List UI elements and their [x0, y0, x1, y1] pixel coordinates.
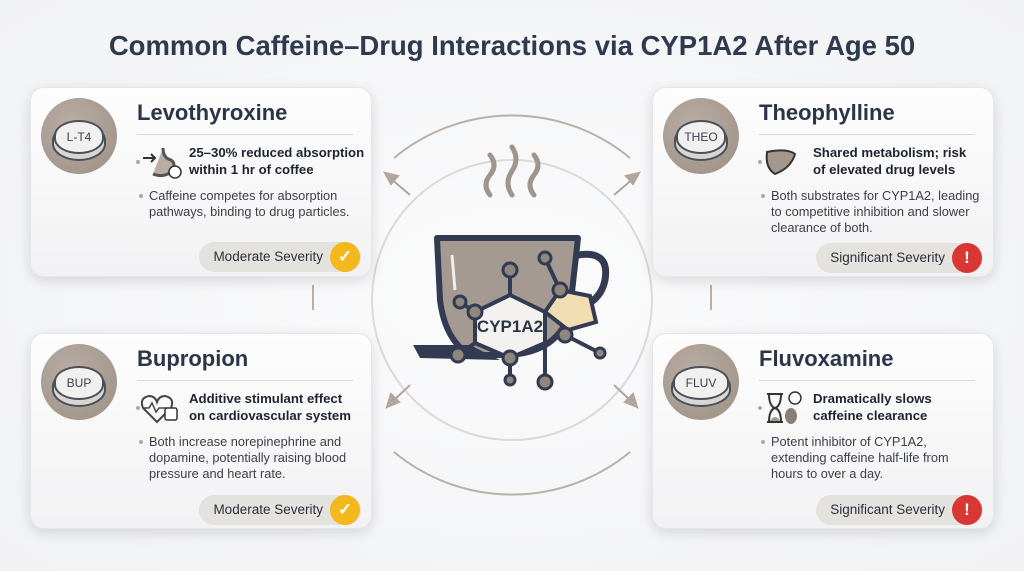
text: detail: to competitive inhibition and slower: [771, 204, 969, 219]
text: detail: Caffeine competes for absorption: [149, 188, 337, 203]
badge: moderate: Moderate Severity: [213, 502, 323, 517]
badge: significant: !: [964, 248, 970, 267]
badge: moderate: [199, 242, 361, 272]
text: detail: Potent inhibitor of CYP1A2,: [771, 434, 927, 449]
heading: Bupropion: [137, 346, 248, 371]
text: key effect: Additive stimulant effect: [189, 391, 342, 406]
icon: liver: [758, 149, 796, 176]
badge: significant: Significant Severity: [830, 502, 945, 517]
icon: coffee cup with molecule: CYP1A2: [477, 317, 543, 336]
panel: Fluvoxamine: [652, 333, 994, 529]
heading: Levothyroxine: [137, 100, 287, 125]
text: detail: [139, 434, 346, 482]
text: detail: [761, 434, 949, 482]
icon: FLUV pill: [663, 344, 739, 420]
text: detail: hours to over a day.: [771, 466, 883, 481]
badge: significant: [816, 495, 983, 525]
text: key effect: [813, 145, 966, 177]
icon: coffee cup with molecule: [413, 147, 606, 389]
text: detail: Both increase norepinephrine and: [149, 434, 341, 449]
icon: FLUV pill: FLUV: [686, 376, 716, 390]
text: key effect: [189, 145, 364, 177]
text: key effect: Shared metabolism; risk: [813, 145, 966, 160]
icon: THEO pill: [663, 98, 739, 174]
text: key effect: 25–30% reduced absorption: [189, 145, 364, 160]
text: key effect: on cardiovascular system: [189, 408, 351, 423]
panel: Levothyroxine: [30, 87, 372, 277]
badge: moderate: ✓: [338, 500, 352, 519]
icon: L-T4 pill: [41, 98, 117, 174]
text: detail: pressure and heart rate.: [149, 466, 286, 481]
text: detail: pathways, binding to drug particles.: [149, 204, 350, 219]
panel: Bupropion: [30, 333, 372, 529]
heading: Fluvoxamine: [759, 346, 893, 371]
badge: moderate: [199, 495, 361, 525]
badge: significant: !: [964, 500, 970, 519]
badge: significant: [816, 243, 983, 273]
badge: moderate: Moderate Severity: [213, 249, 323, 264]
icon: THEO pill: THEO: [684, 130, 718, 144]
text: key effect: within 1 hr of coffee: [189, 162, 314, 177]
outer arcs: [313, 115, 711, 495]
text: detail: [139, 188, 350, 220]
icon: hourglass and bean: [758, 391, 802, 424]
text: detail: clearance of both.: [771, 220, 873, 235]
icon: L-T4 pill: L-T4: [67, 130, 91, 144]
text: detail: extending caffeine half-life from: [771, 450, 949, 465]
text: detail: [761, 188, 979, 236]
heading: Theophylline: [759, 100, 895, 125]
text: key effect: caffeine clearance: [813, 408, 927, 423]
text: key effect: [189, 391, 351, 423]
badge: significant: Significant Severity: [830, 250, 945, 265]
icon: BUP pill: BUP: [67, 376, 91, 390]
badge: moderate: ✓: [338, 247, 352, 266]
icon: heart monitor: [136, 395, 178, 424]
text: detail: dopamine, potentially raising blood: [149, 450, 346, 465]
text: key effect: of elevated drug levels: [813, 162, 955, 177]
text: key effect: [813, 391, 932, 423]
icon: BUP pill: [41, 344, 117, 420]
arrows: [385, 173, 639, 407]
text: detail: Both substrates for CYP1A2, leading: [771, 188, 979, 203]
icon: stomach clock: [136, 148, 182, 179]
title: Common Caffeine–Drug Interactions via CYP1A2 After Age 50: [109, 30, 915, 61]
panel: Theophylline: [652, 87, 994, 277]
text: key effect: Dramatically slows: [813, 391, 932, 406]
